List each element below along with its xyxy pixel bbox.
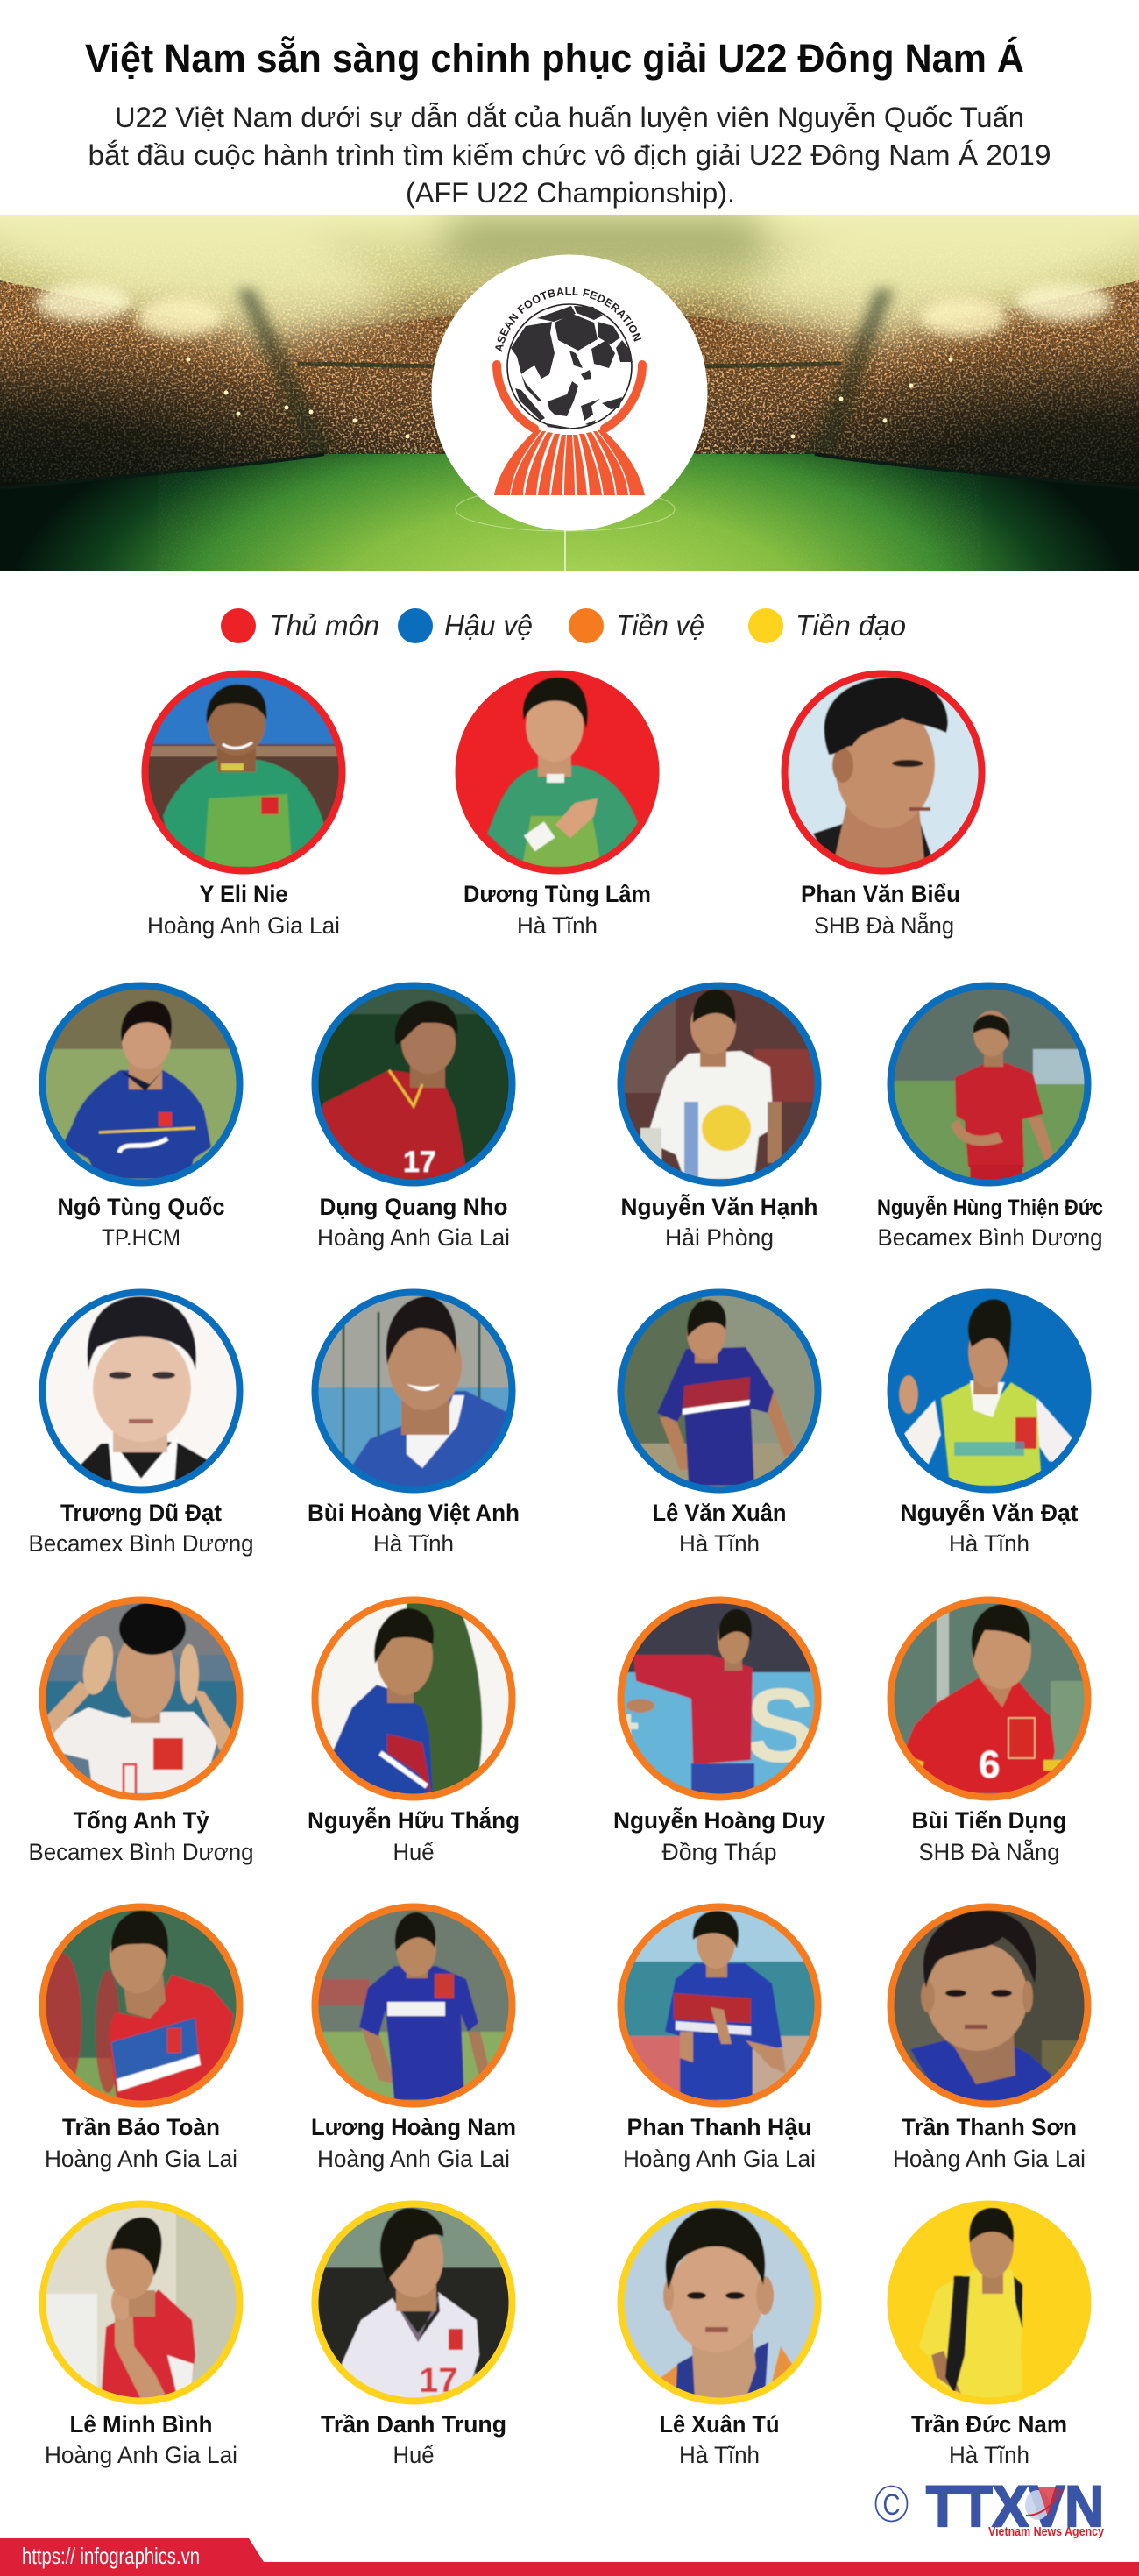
intro text (88, 102, 1051, 209)
portrait (312, 2200, 515, 2405)
logo globe (507, 304, 633, 429)
club: Hà Tĩnh (949, 2442, 1029, 2468)
agency globe (1025, 2487, 1063, 2520)
player: Nguyễn Văn Đạt (887, 1288, 1092, 1557)
club: Hoàng Anh Gia Lai (317, 2146, 510, 2172)
name: Nguyễn Văn Đạt (901, 1499, 1078, 1526)
portrait: 17 (403, 1146, 436, 1179)
player: Lương Hoàng Nam (311, 1904, 516, 2172)
portrait (616, 1597, 822, 1800)
portrait (782, 670, 985, 875)
portrait (887, 2200, 1092, 2405)
name: Nguyễn Hữu Thắng (308, 1806, 520, 1834)
agency name: Vietnam News Agency (988, 2525, 1104, 2539)
logo sheaf (494, 365, 645, 495)
name: Lê Văn Xuân (652, 1500, 787, 1526)
name: Lương Hoàng Nam (311, 2114, 516, 2140)
portrait (887, 1904, 1092, 2107)
club: Huế (393, 1839, 435, 1865)
portrait: t (616, 1697, 640, 1775)
name: Tống Anh Tỷ (74, 1807, 209, 1834)
legend: defender: Hậu vệ (444, 609, 533, 642)
name: Bùi Tiến Dụng (911, 1807, 1067, 1834)
player: Lê Xuân Tú (617, 2200, 822, 2468)
club: Hoàng Anh Gia Lai (45, 2146, 237, 2172)
club: Hà Tĩnh (373, 1530, 454, 1557)
name: Ngô Tùng Quốc (58, 1194, 224, 1220)
player: Phan Văn Biểu (782, 670, 985, 939)
club: Hoàng Anh Gia Lai (893, 2146, 1086, 2172)
portrait (39, 2200, 244, 2405)
player: Nguyễn Văn Hạnh (617, 982, 822, 1251)
portrait (39, 982, 244, 1187)
portrait (312, 1904, 515, 2107)
name: Dương Tùng Lâm (463, 881, 651, 907)
player: Dương Tùng Lâm (456, 670, 659, 939)
logo disc (431, 254, 708, 531)
portrait (617, 1904, 822, 2107)
club: Hà Tĩnh (679, 1530, 760, 1557)
club: Hoàng Anh Gia Lai (147, 912, 340, 939)
player: Lê Văn Xuân (617, 1288, 822, 1557)
legend: midfielder: Tiền vệ (616, 609, 704, 642)
intro text: bắt đầu cuộc hành trình tìm kiếm chức vô địch giải U22 Đông Nam Á 2019 (88, 139, 1051, 171)
portrait (887, 982, 1092, 1187)
portrait (312, 982, 515, 1187)
name: Nguyễn Hoàng Duy (613, 1806, 825, 1834)
player: Y Eli Nie (142, 670, 345, 939)
player: Dụng Quang Nho (312, 982, 515, 1251)
player: Lê Minh Bình (39, 2200, 244, 2468)
club: Huế (393, 2442, 435, 2468)
club: Becamex Bình Dương (878, 1224, 1102, 1251)
portrait (617, 1288, 822, 1494)
club: Hà Tĩnh (517, 912, 598, 939)
club: Becamex Bình Dương (28, 1530, 254, 1557)
club: Hoàng Anh Gia Lai (317, 1224, 510, 1251)
website url: https:// infographics.vn (22, 2543, 200, 2569)
portrait (142, 670, 345, 875)
intro text: (AFF U22 Championship). (406, 177, 735, 209)
legend (221, 608, 906, 643)
legend: defender (398, 608, 533, 643)
player: Bùi Tiến Dụng (887, 1597, 1092, 1865)
player: Bùi Hoàng Việt Anh (308, 1288, 520, 1557)
name: Phan Văn Biểu (801, 881, 960, 907)
portrait (617, 2200, 822, 2405)
legend: forward (748, 608, 906, 643)
logo text: ASEAN FOOTBALL FEDERATION (495, 287, 641, 352)
portrait (312, 1597, 515, 1800)
banner: stadium with AFF logo (0, 215, 1139, 571)
portrait (887, 1597, 1092, 1800)
portrait: 17 (419, 2361, 457, 2400)
portrait (39, 1597, 244, 1800)
player: Trần Thanh Sơn (887, 1904, 1092, 2172)
legend: goalkeeper (221, 608, 379, 643)
legend: midfielder (569, 608, 704, 643)
name: Trần Đức Nam (911, 2411, 1067, 2438)
copyright mark (876, 2486, 908, 2522)
player: Phan Thanh Hậu (617, 1904, 822, 2172)
player: Nguyễn Hữu Thắng (308, 1597, 520, 1865)
player: Trần Danh Trung (312, 2200, 515, 2468)
club: Becamex Bình Dương (28, 1839, 254, 1865)
portrait: 6 (979, 1743, 1000, 1786)
portrait (617, 982, 822, 1187)
club: Đồng Tháp (662, 1839, 776, 1865)
name: Nguyễn Văn Hạnh (620, 1193, 818, 1220)
TTXVN logo (876, 2473, 1104, 2539)
name: Lê Xuân Tú (659, 2411, 780, 2438)
portrait: S (746, 1667, 816, 1785)
name: Trần Danh Trung (321, 2411, 506, 2438)
club: Hà Tĩnh (679, 2442, 760, 2468)
player: Trần Đức Nam (887, 2200, 1092, 2468)
player: Nguyễn Hùng Thiện Đức (877, 982, 1103, 1251)
legend: goalkeeper: Thủ môn (269, 609, 379, 642)
club: SHB Đà Nẵng (814, 912, 954, 939)
name: Dụng Quang Nho (319, 1194, 508, 1220)
agency wordmark: TTXVN (926, 2473, 1104, 2538)
name: Trần Bảo Toàn (62, 2114, 220, 2140)
portrait (39, 1288, 244, 1494)
name: Trương Dũ Đạt (60, 1500, 222, 1526)
player: Tống Anh Tỷ (28, 1597, 254, 1865)
title: Việt Nam sẵn sàng chinh phục giải U22 Đông Nam Á (85, 36, 1024, 81)
club: Hà Tĩnh (949, 1530, 1029, 1557)
club: Hải Phòng (665, 1224, 774, 1251)
player: Trần Bảo Toàn (39, 1904, 244, 2172)
footer bar (0, 2538, 1139, 2576)
portrait (887, 1288, 1092, 1494)
intro text: U22 Việt Nam dưới sự dẫn dắt của huấn luyện viên Nguyễn Quốc Tuấn (115, 102, 1024, 133)
club: SHB Đà Nẵng (918, 1838, 1060, 1865)
player: Nguyễn Hoàng Duy (613, 1597, 825, 1865)
name: Lê Minh Bình (70, 2411, 212, 2438)
copyright mark: C (883, 2488, 901, 2522)
name: Trần Thanh Sơn (902, 2114, 1077, 2140)
portrait (312, 1288, 515, 1494)
club: TP.HCM (102, 1224, 180, 1251)
legend: forward: Tiền đạo (796, 609, 906, 642)
name: Phan Thanh Hậu (627, 2114, 811, 2140)
player: Ngô Tùng Quốc (39, 982, 244, 1251)
name: Nguyễn Hùng Thiện Đức (877, 1194, 1103, 1220)
club: Hoàng Anh Gia Lai (45, 2442, 237, 2468)
player: Trương Dũ Đạt (28, 1288, 254, 1557)
name: Bùi Hoàng Việt Anh (308, 1500, 520, 1526)
portrait (39, 1904, 244, 2107)
name: Y Eli Nie (200, 881, 287, 907)
portrait (456, 670, 659, 875)
club: Hoàng Anh Gia Lai (623, 2146, 816, 2172)
